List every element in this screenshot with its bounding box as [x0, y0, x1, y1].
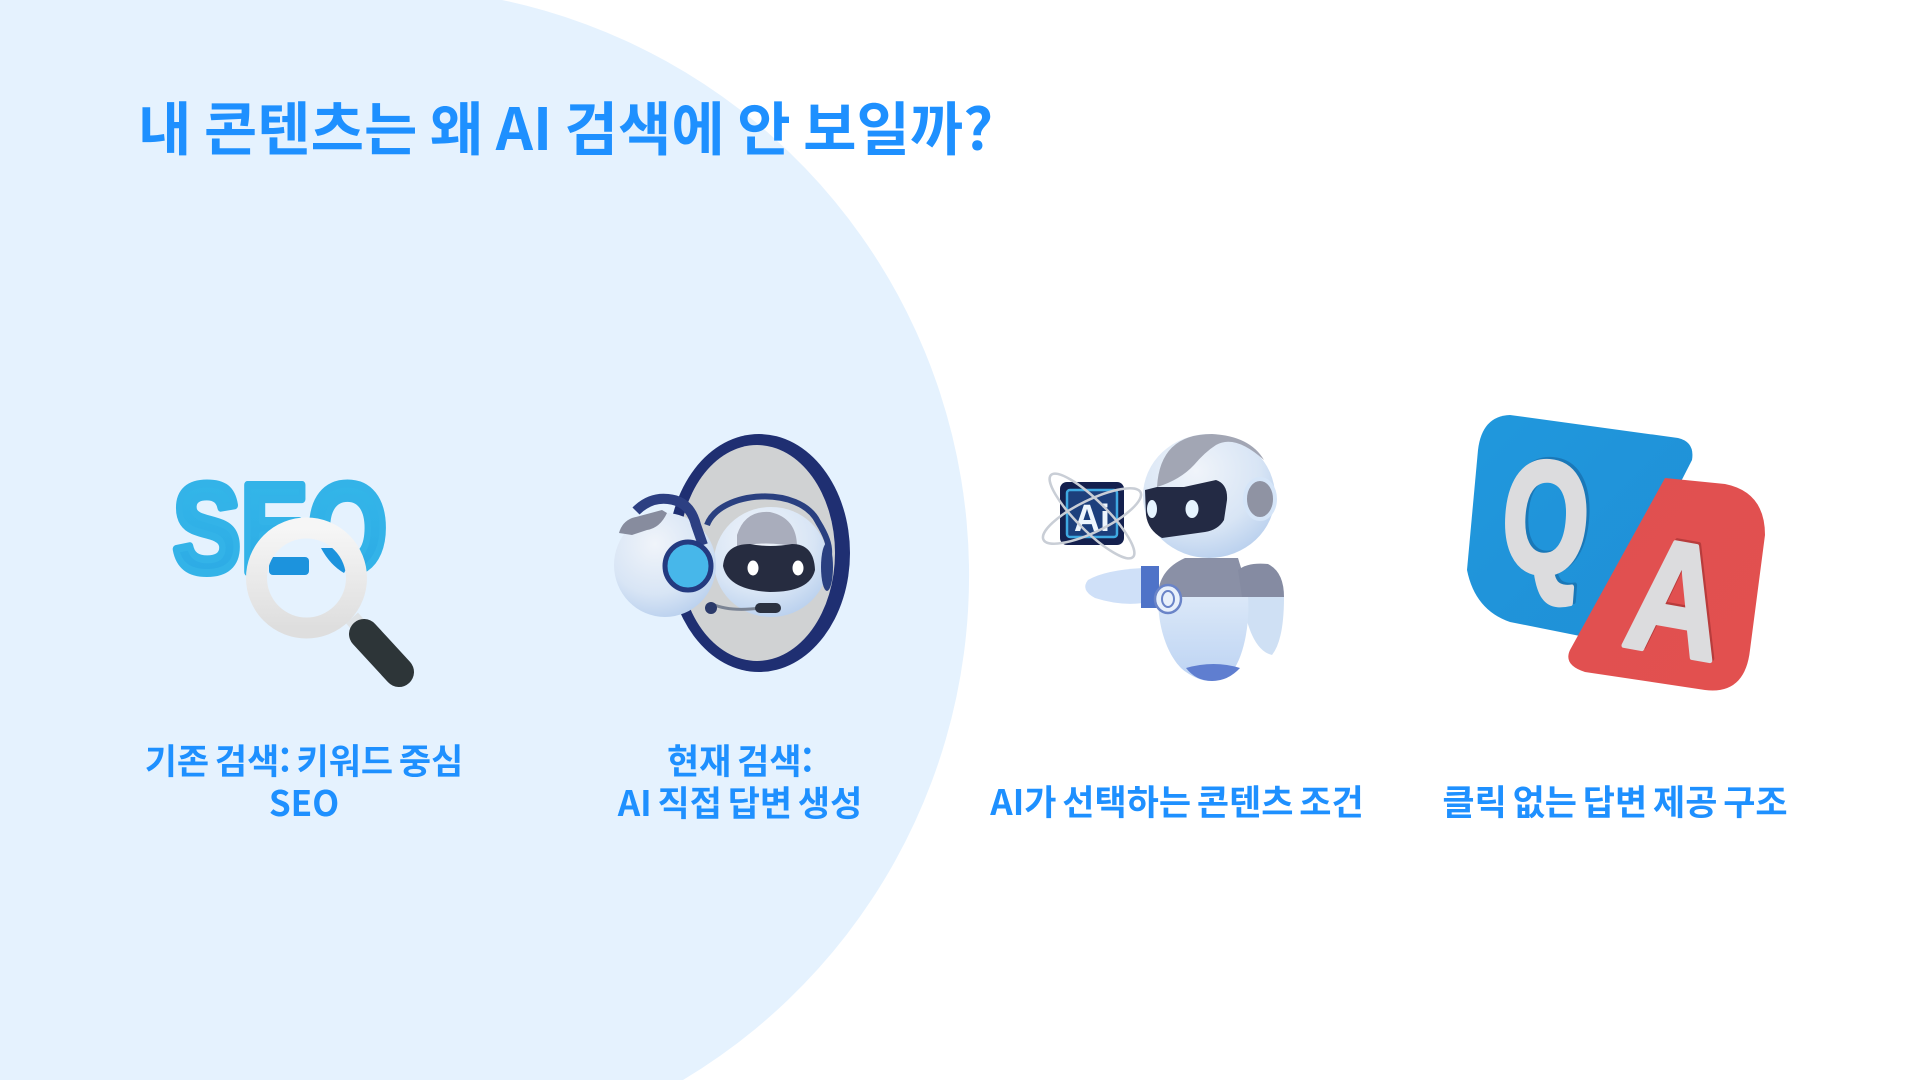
oval frame	[668, 434, 850, 672]
label: content conditions: AI가 선택하는 콘텐츠 조건	[990, 775, 1364, 826]
label: existing search: SEO	[269, 776, 339, 827]
label: current search	[618, 734, 862, 827]
icon: SEO with magnifier	[172, 458, 414, 687]
Q tile: Q	[1497, 427, 1595, 609]
label: existing search: 기존 검색: 키워드 중심	[145, 734, 463, 785]
icon: Q and A tiles	[1467, 415, 1765, 696]
AI chip with orbits	[1036, 464, 1148, 568]
A tile: A	[1614, 504, 1739, 696]
icon: robot holding AI chip	[1042, 434, 1284, 681]
A tile	[1568, 478, 1765, 696]
front robot head with headset	[614, 499, 717, 617]
pointing arm	[1085, 566, 1159, 608]
icon: robot with headset in mirror	[614, 434, 850, 672]
SEO letters: SEO	[173, 458, 387, 599]
body base	[1186, 664, 1240, 681]
label: current search: 현재 검색:	[667, 734, 813, 785]
title: 내 콘텐츠는 왜 AI 검색에 안 보일까?	[138, 83, 993, 167]
torso and shoulder	[1158, 558, 1284, 597]
A tile: A	[1616, 502, 1741, 694]
Q tile	[1467, 415, 1692, 640]
chest ring	[1155, 585, 1181, 613]
label: zero-click structure: 클릭 없는 답변 제공 구조	[1442, 775, 1788, 826]
Q tile: Q	[1500, 425, 1598, 607]
right arm	[1242, 597, 1284, 655]
magnifier	[256, 528, 399, 672]
label: current search: AI 직접 답변 생성	[618, 776, 862, 827]
AI chip with orbits: Ai	[1074, 498, 1110, 540]
label: existing search	[145, 734, 463, 827]
robot head	[1143, 434, 1275, 558]
mirrored robot head	[707, 496, 833, 617]
body	[1158, 597, 1248, 681]
